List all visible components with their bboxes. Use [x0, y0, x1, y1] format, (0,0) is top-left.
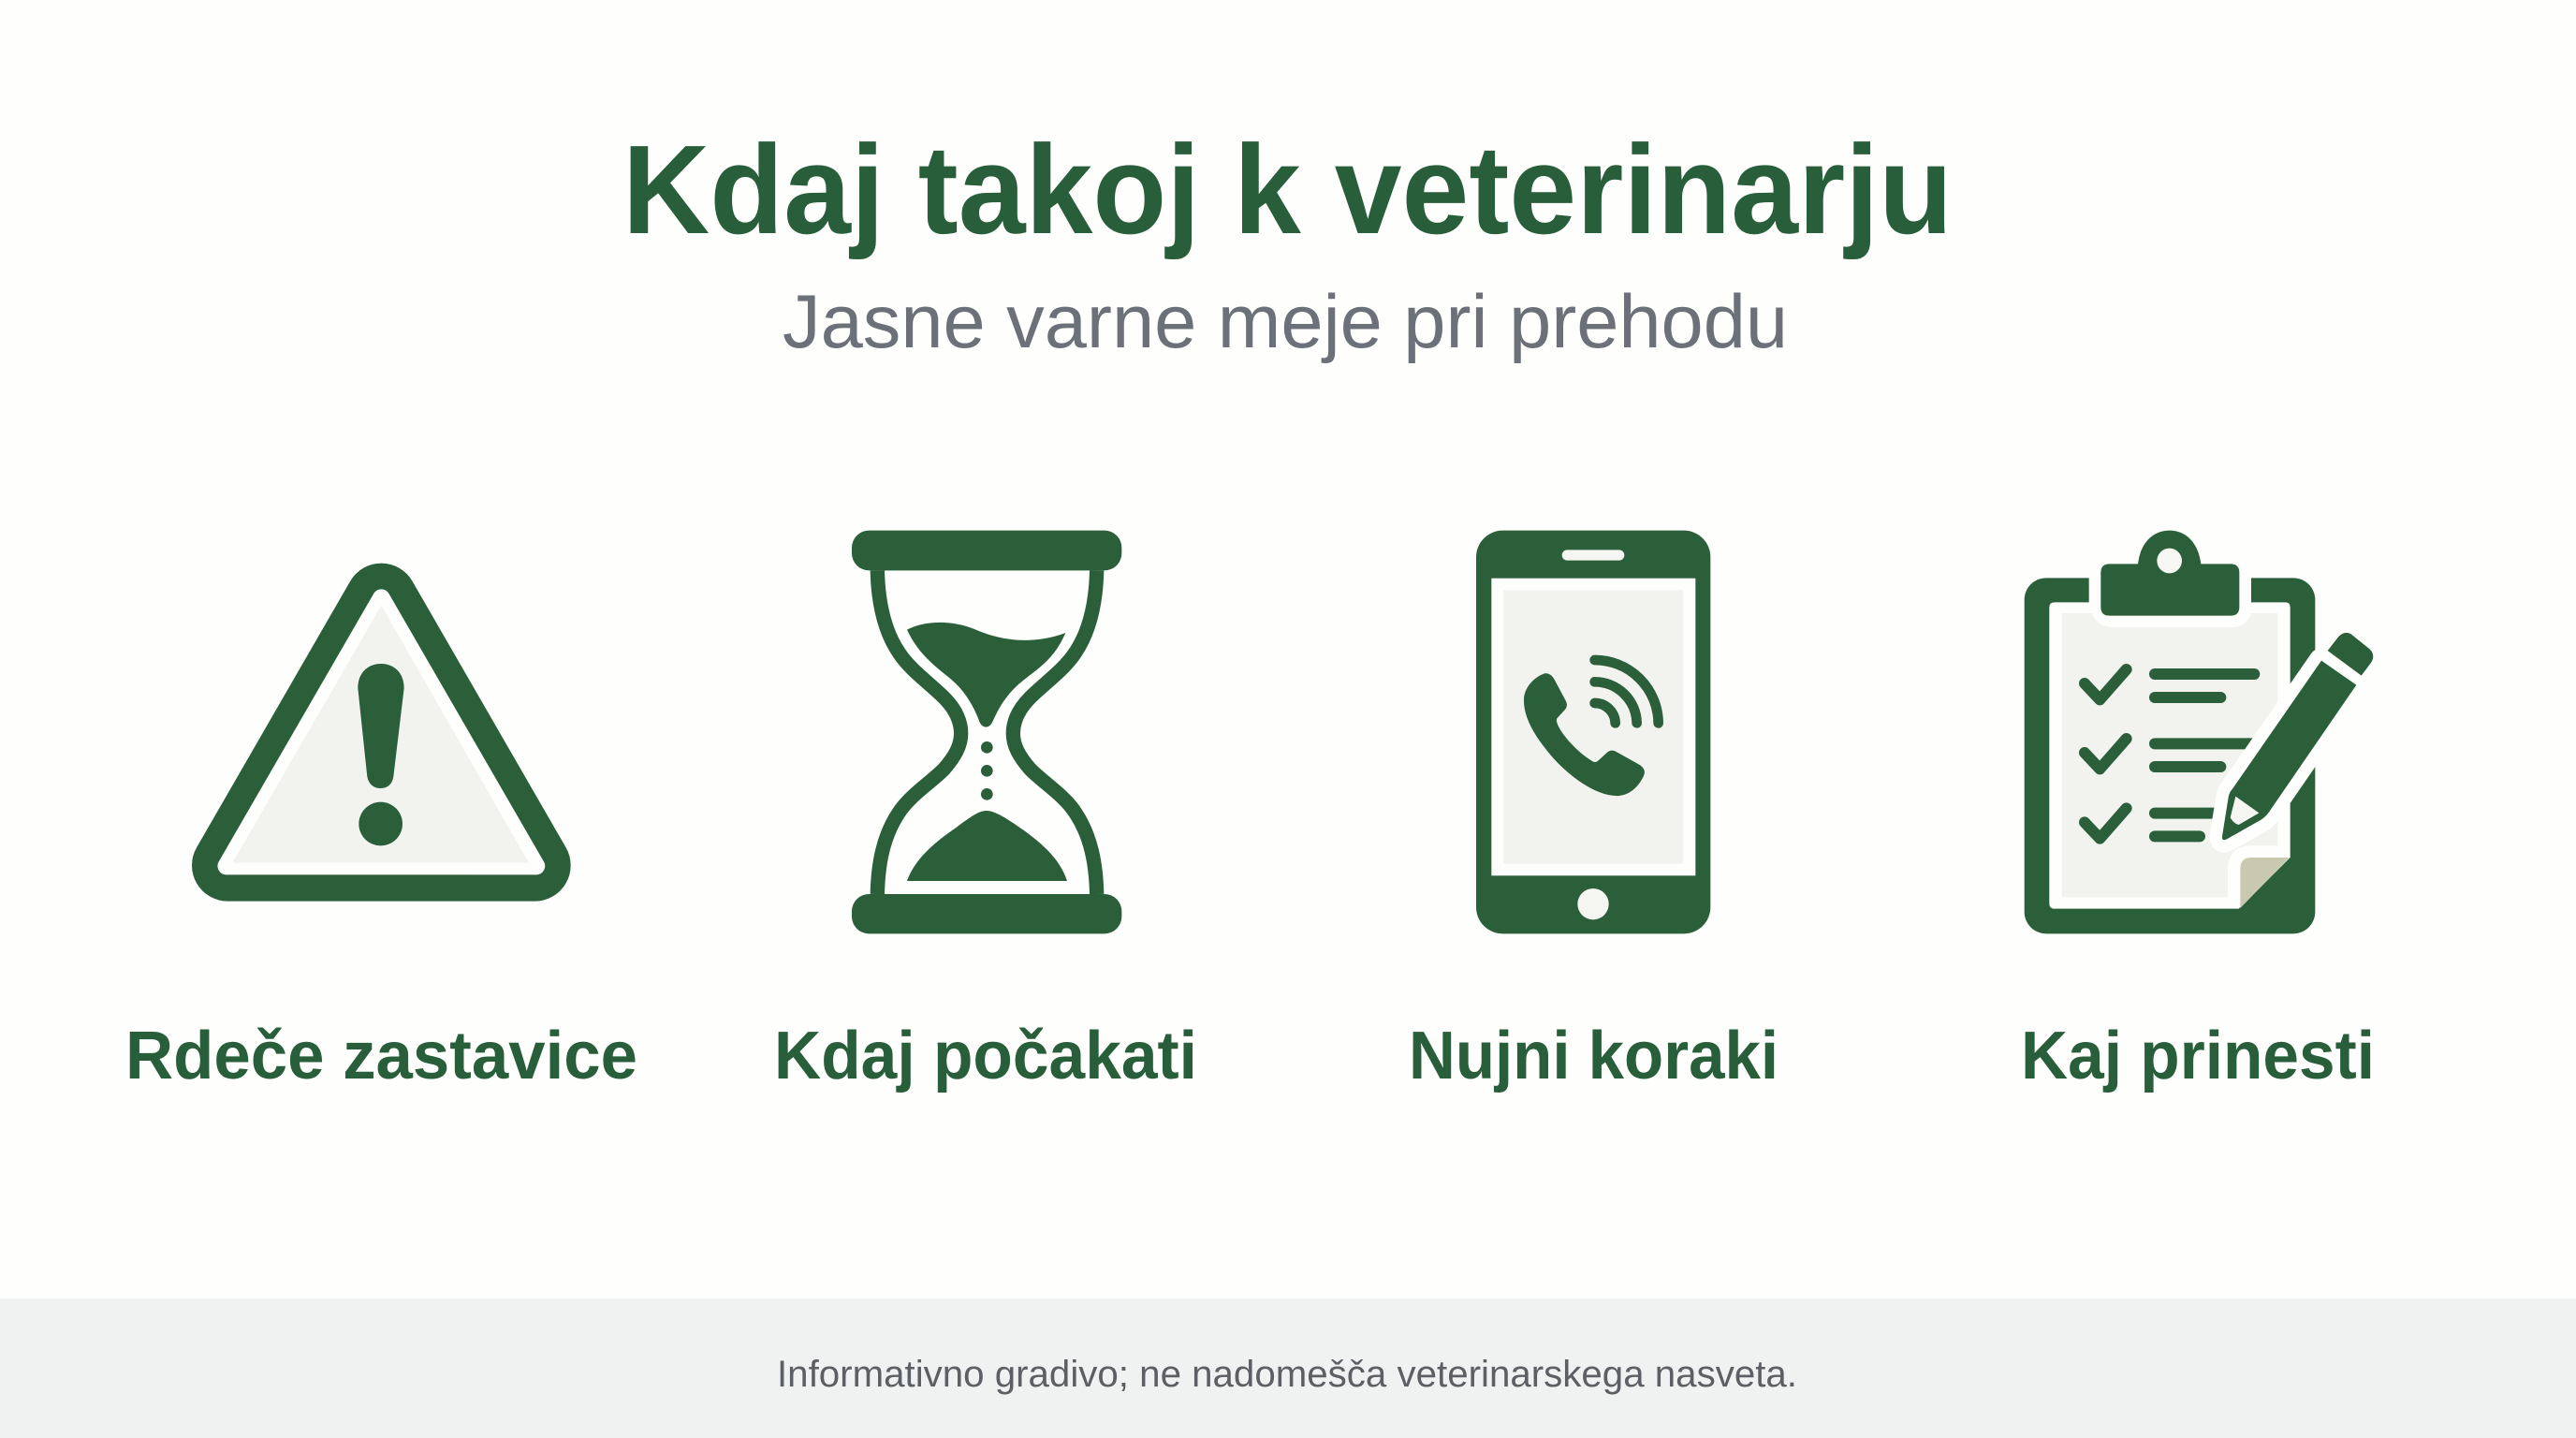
icon: phone call	[1476, 531, 1710, 933]
label: Kaj prinesti: Kaj prinesti	[2021, 1018, 2375, 1093]
footer disclaimer: Informativno gradivo; ne nadomešča veterinarskega nasveta.	[777, 1354, 1797, 1395]
label: Kdaj počakati: Kdaj počakati	[774, 1018, 1197, 1093]
label: Rdeče zastavice: Rdeče zastavice	[125, 1018, 637, 1093]
icon: warning triangle	[192, 564, 571, 902]
icon: clipboard with checklist and pencil	[2025, 531, 2373, 933]
title: Kdaj takoj k veterinarju	[622, 119, 1953, 260]
footer band	[0, 1299, 2576, 1438]
subtitle: Jasne varne meje pri prehodu	[783, 280, 1788, 364]
label: Nujni koraki: Nujni koraki	[1409, 1018, 1778, 1093]
icon: hourglass	[852, 531, 1121, 933]
